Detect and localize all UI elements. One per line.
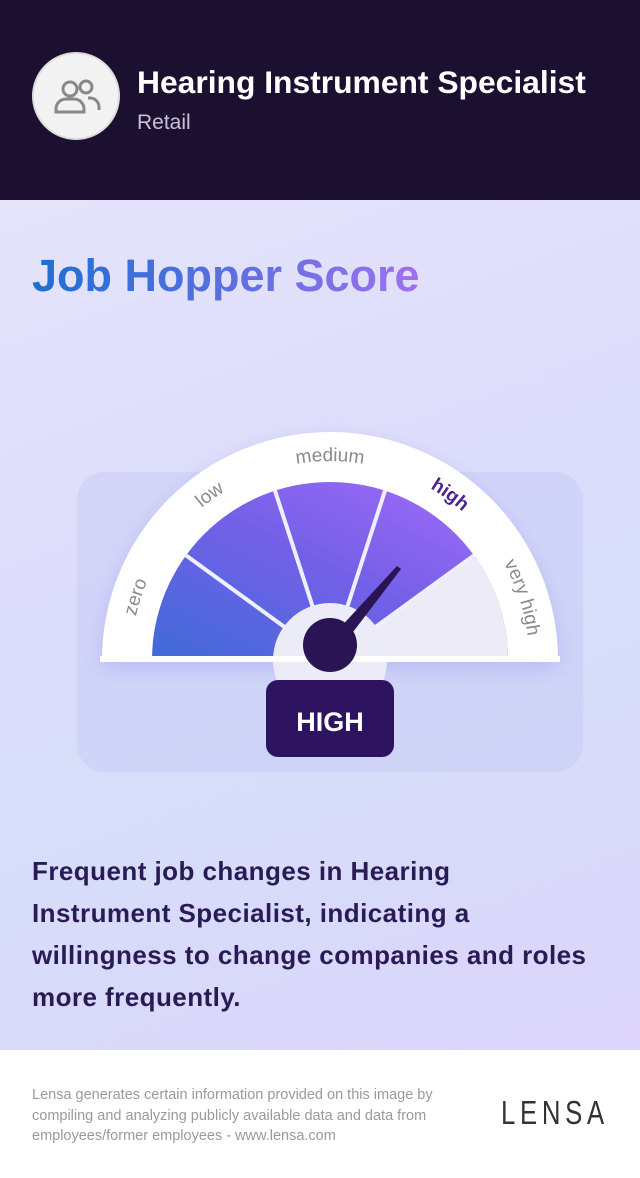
badge: HIGH: HIGH bbox=[296, 707, 364, 737]
footer bbox=[0, 1050, 640, 1178]
chart: gauge: very high bbox=[506, 558, 540, 635]
gauge card bbox=[77, 472, 583, 772]
logo: LENSA: LENSA bbox=[501, 1094, 609, 1131]
text block: description: Frequent job changes in Hearing bbox=[32, 856, 450, 886]
chart: gauge: medium bbox=[296, 447, 364, 464]
subtitle: industry: Retail bbox=[137, 111, 191, 134]
title: job name: Hearing Instrument Specialist bbox=[137, 64, 586, 100]
chart: gauge: low bbox=[194, 482, 222, 507]
needle bbox=[303, 566, 401, 672]
text block: description bbox=[32, 856, 586, 1012]
header bbox=[0, 0, 640, 200]
text block: description: willingness to change companies and roles bbox=[32, 940, 586, 970]
badge: HIGH bbox=[266, 680, 394, 757]
icon: avatar bbox=[32, 52, 120, 140]
text block: description: more frequently. bbox=[32, 982, 241, 1012]
text block: disclaimer: Lensa generates certain information provided on this image by compiling and analyzing publicly available data and data from employees/former employees - www.lensa.com bbox=[32, 1087, 433, 1144]
text block: description: Instrument Specialist, indicating a bbox=[32, 898, 470, 928]
chart: gauge: high bbox=[431, 477, 467, 511]
main panel bbox=[0, 200, 640, 1050]
heading: Job Hopper Score: Job Hopper Score bbox=[32, 250, 420, 301]
gauge labels: zero bbox=[126, 579, 146, 616]
